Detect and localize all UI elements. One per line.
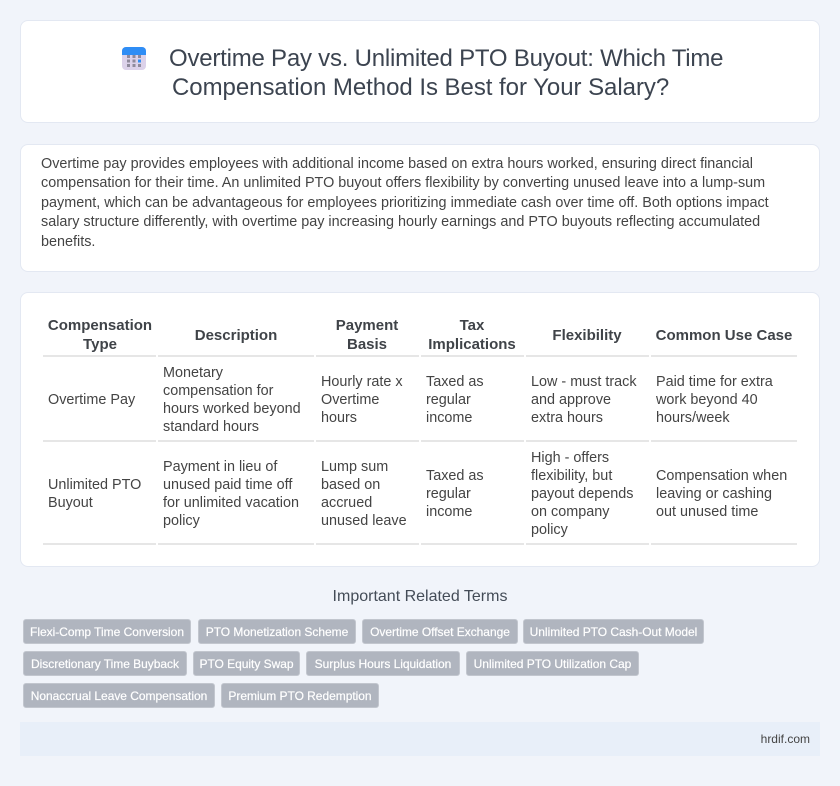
summary text: payment, which can be advantageous for employees prioritizing immediate cash over time off. Both options impact: [41, 195, 769, 211]
table headers: [48, 317, 792, 353]
summary text: compensation for their time. An unlimited PTO buyout offers flexibility by converting unused leave into a lump-sum: [41, 175, 765, 191]
table row: Overtime Pay: Overtime Pay: [48, 392, 135, 408]
table row: Unlimited PTO Buyout: income: [426, 504, 472, 520]
tags: related terms: Discretionary Time Buyback: [31, 657, 179, 671]
summary text: salary structure differently, with overtime pay increasing hourly earnings and PTO buyouts reflecting accumulated: [41, 214, 760, 230]
tags: related terms: Flexi-Comp Time Conversion: [30, 625, 184, 639]
table row: Overtime Pay: regular: [426, 392, 471, 408]
table row: Overtime Pay: [48, 365, 773, 435]
tags: related terms: Unlimited PTO Cash-Out Model: [530, 625, 697, 639]
table row: Overtime Pay: hours/week: [656, 410, 730, 426]
table row: Overtime Pay: income: [426, 410, 472, 426]
table row: Unlimited PTO Buyout: on company: [531, 504, 609, 520]
table row: Unlimited PTO Buyout: unused paid time off: [163, 477, 292, 493]
table row: Overtime Pay: Taxed as: [426, 374, 484, 390]
tags: related terms: Surplus Hours Liquidation: [315, 657, 451, 671]
summary text: Overtime pay provides employees with additional income based on extra hours worked, ensuring direct financial: [41, 156, 753, 172]
table row: Unlimited PTO Buyout: [48, 450, 787, 538]
table row: Overtime Pay: extra hours: [531, 410, 603, 426]
table row: Overtime Pay: compensation for: [163, 383, 273, 399]
summary text: [41, 156, 769, 250]
tags: related terms: [23, 619, 704, 708]
panel: summary: [20, 144, 820, 272]
footer source: hrdif.com: [761, 732, 810, 746]
table row: Unlimited PTO Buyout: policy: [163, 513, 200, 529]
panel: title header: [20, 20, 820, 123]
table headers: Description: [195, 327, 277, 344]
table headers: Flexibility: [552, 327, 622, 344]
table row: Overtime Pay: Paid time for extra: [656, 374, 773, 390]
table row: Unlimited PTO Buyout: based on: [321, 477, 380, 493]
table row: Unlimited PTO Buyout: policy: [531, 522, 568, 538]
table row: Unlimited PTO Buyout: flexibility, but: [531, 468, 612, 484]
table headers: Common Use Case: [656, 327, 792, 344]
title: Overtime Pay vs. Unlimited PTO Buyout: Which Time: [169, 45, 723, 72]
table row: Unlimited PTO Buyout: leaving or cashing: [656, 486, 772, 502]
table row: Unlimited PTO Buyout: regular: [426, 486, 471, 502]
table headers: Type: [83, 336, 117, 353]
table row: Unlimited PTO Buyout: for unlimited vacation: [163, 495, 299, 511]
tags: related terms: Unlimited PTO Utilization Cap: [474, 657, 631, 671]
tags: related terms: PTO Equity Swap: [199, 657, 294, 671]
tags: related terms: PTO Monetization Scheme: [206, 625, 348, 639]
table row: Overtime Pay: hours: [321, 410, 357, 426]
table headers: Basis: [347, 336, 387, 353]
table row: Overtime Pay: Hourly rate x: [321, 374, 403, 390]
table row: Unlimited PTO Buyout: Lump sum: [321, 459, 388, 475]
table row: Overtime Pay: and approve: [531, 392, 611, 408]
tags: related terms: Overtime Offset Exchange: [370, 625, 510, 639]
table row: Overtime Pay: work beyond 40: [656, 392, 758, 408]
panel: comparison table: [20, 292, 820, 567]
summary text: benefits.: [41, 234, 95, 250]
table row: Overtime Pay: standard hours: [163, 419, 259, 435]
tags: related terms: Premium PTO Redemption: [228, 689, 372, 703]
heading: related terms: Important Related Terms: [333, 588, 507, 605]
table row: Unlimited PTO Buyout: Payment in lieu of: [163, 459, 277, 475]
table row: Overtime Pay: Low - must track: [531, 374, 637, 390]
table row: Unlimited PTO Buyout: unused leave: [321, 513, 407, 529]
table row: Unlimited PTO Buyout: Taxed as: [426, 468, 484, 484]
table headers: Compensation: [48, 317, 152, 334]
icon: calendar: [122, 47, 146, 70]
table row: Unlimited PTO Buyout: High - offers: [531, 450, 609, 466]
table headers: Tax: [460, 317, 484, 334]
table row: Overtime Pay: Monetary: [163, 365, 223, 381]
table headers: Implications: [428, 336, 516, 353]
table headers: Payment: [336, 317, 398, 334]
footer bar: [20, 722, 820, 756]
table row: Unlimited PTO Buyout: out unused time: [656, 504, 758, 520]
title: Compensation Method Is Best for Your Salary?: [172, 74, 669, 101]
table row: Unlimited PTO Buyout: Compensation when: [656, 468, 787, 484]
table row: Unlimited PTO Buyout: Buyout: [48, 495, 93, 511]
table row: Unlimited PTO Buyout: Unlimited PTO: [48, 477, 141, 493]
table row: Unlimited PTO Buyout: accrued: [321, 495, 372, 511]
title: [169, 45, 723, 101]
table row: Unlimited PTO Buyout: payout depends: [531, 486, 633, 502]
table row: Overtime Pay: hours worked beyond: [163, 401, 301, 417]
tags: related terms: Nonaccrual Leave Compensation: [31, 689, 207, 703]
table row: Overtime Pay: Overtime: [321, 392, 379, 408]
